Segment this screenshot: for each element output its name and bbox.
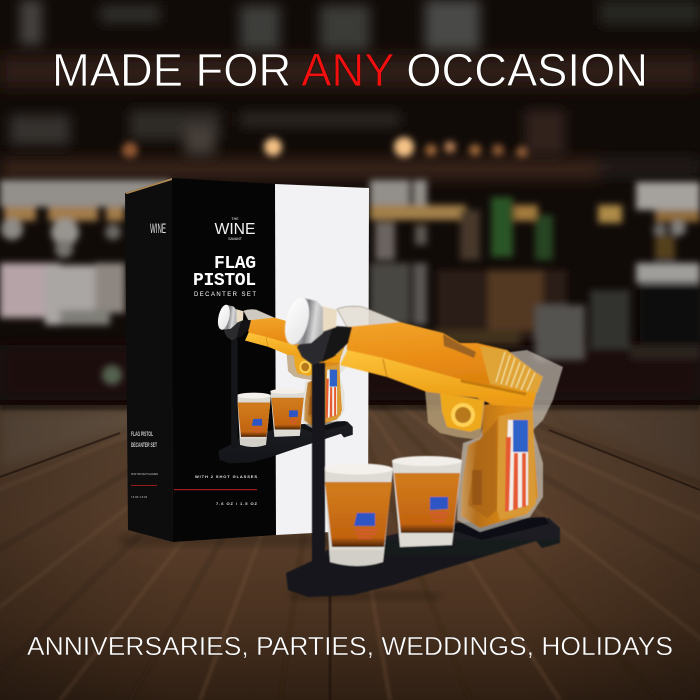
heading: MADE FOR ANY OCCASION (52, 44, 648, 96)
product box: WINE (150, 220, 166, 236)
box: side text: FLAG PISTOL (131, 432, 153, 438)
caption: ANNIVERSARIES, PARTIES, WEDDINGS, HOLIDAYS (27, 631, 673, 661)
box: side text: DECANTER SET (131, 443, 157, 449)
box: side panel (125, 178, 173, 542)
box: product name: FLAG (214, 254, 256, 274)
box: brand logo: SAVANT (228, 237, 243, 241)
box: white panel (275, 184, 369, 535)
box: brand logo (214, 217, 256, 241)
pistol decanter (337, 306, 563, 532)
product box (125, 178, 369, 542)
box: side text: WITH TWO SHOT GLASSES (131, 472, 158, 476)
shot glasses (323, 456, 462, 566)
background: wooden table (0, 405, 700, 700)
box: printed product photo (216, 303, 354, 463)
stand base (286, 517, 560, 597)
box: volume note: 7.6 OZ / 1.5 OZ (216, 501, 258, 506)
box: brand logo: WINE (214, 221, 256, 238)
box: front black panel (172, 178, 276, 542)
box: shot glass note: WITH 2 SHOT GLASSES (195, 474, 257, 479)
box: red rule (174, 489, 257, 490)
box: product name: DECANTER SET (194, 292, 256, 298)
background: blurred bar shelves (0, 0, 700, 405)
box: top edge (125, 178, 172, 194)
stand post and stopper (281, 295, 352, 568)
box: brand logo: THE (231, 217, 239, 221)
box: side text (131, 220, 166, 499)
decanter set (281, 295, 563, 597)
box: side text: 7.6 OZ / 1.5 OZ (131, 495, 147, 499)
box: product name: PISTOL (193, 271, 256, 291)
box: product name (193, 254, 256, 298)
